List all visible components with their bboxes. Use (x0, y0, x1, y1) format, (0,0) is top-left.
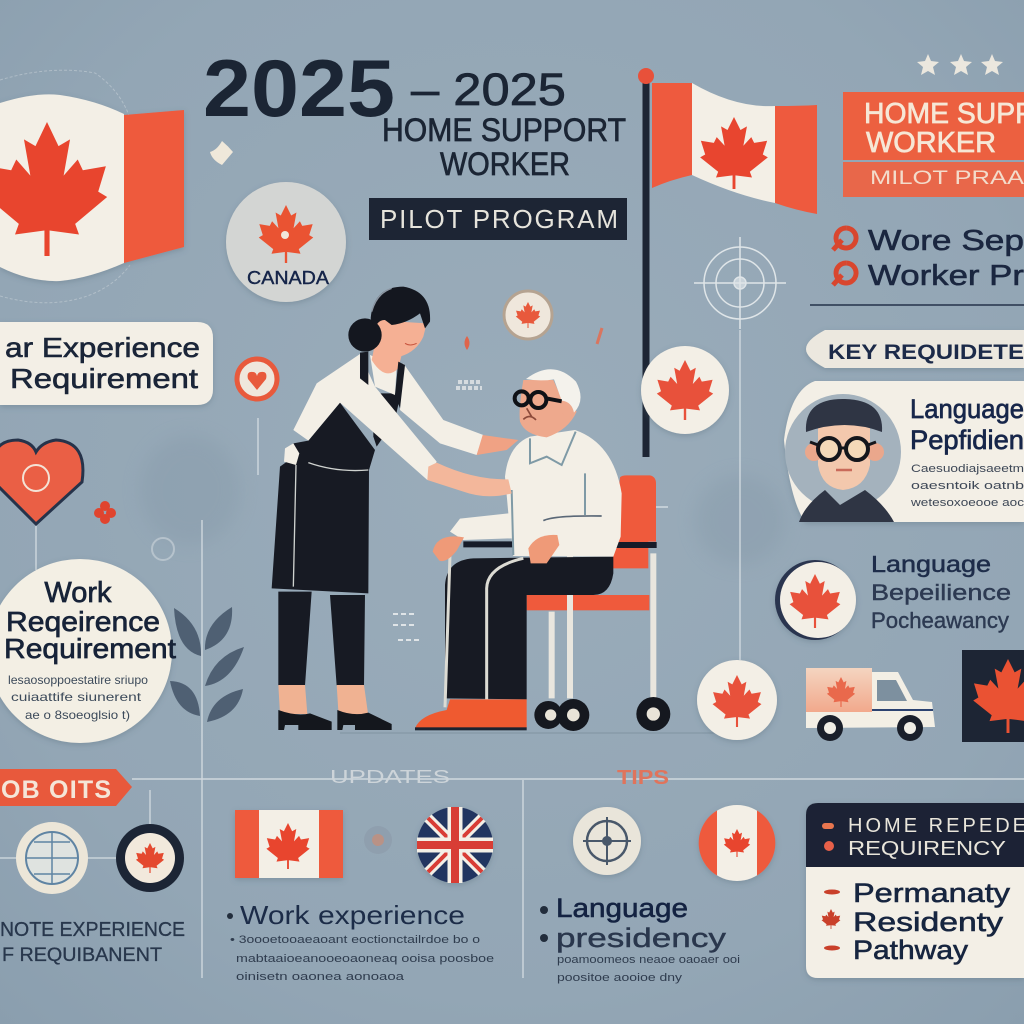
card header text: HOME REPEDE (848, 815, 1024, 837)
bullet text two: Worker Pr (868, 260, 1024, 292)
bullet text one: Wore Sep (868, 225, 1024, 257)
key requirements pill: KEY REQUIDETE (828, 341, 1024, 364)
card list: Residenty (853, 907, 1004, 937)
experience requirement pill (0, 322, 213, 405)
bullet icon one (833, 228, 856, 250)
decorative red marks (393, 328, 602, 640)
bottom left caption: NOTE EXPERIENCE (0, 919, 185, 941)
icon: ringed flower badge (116, 790, 184, 892)
column body line one: poamoomeos neaoe oaoaer ooi (557, 954, 740, 966)
updates label: UPDATES (330, 767, 450, 787)
language dependence text (871, 551, 1011, 633)
column heading: Work experience (240, 900, 465, 930)
card header text: REQUIRENCY (848, 838, 1006, 860)
circle body line one: lesaosoppoestatire sriupo (8, 673, 148, 687)
leaf circle lower (697, 660, 777, 740)
job tag (0, 769, 132, 806)
avatar (785, 394, 901, 522)
language column (540, 893, 740, 984)
circle body line two: cuiaattife siunerent (11, 690, 142, 704)
title: program name line one: HOME SUPPORT (382, 112, 626, 148)
language dependence text: Language (871, 551, 991, 577)
stars (917, 54, 1003, 75)
dark leaf block (962, 650, 1024, 742)
experience requirement pill: ar Experience (5, 332, 200, 363)
column heading line one: Language (556, 893, 688, 923)
flag with pole (638, 68, 817, 457)
canada circle flag (699, 805, 775, 881)
canadian flag bottom (235, 810, 343, 878)
card list: Permanaty (853, 878, 1011, 908)
work experience column (227, 900, 494, 983)
union jack circle (417, 807, 493, 883)
icon: small leaf badge (504, 291, 552, 339)
title: small year: – 2025 (411, 64, 566, 115)
column body line two: mabtaaioeanooeoaoneaq ooisa poosboe (236, 953, 494, 965)
title: program name line two: WORKER (440, 146, 570, 182)
card list: Pathway (853, 935, 969, 965)
language proficiency card (784, 381, 1024, 522)
column heading line two: presidency (556, 923, 727, 953)
column body line two: poositoe aooioe dny (557, 972, 683, 984)
work requirement circle (0, 559, 176, 743)
icon: faint ring (152, 538, 174, 560)
circle heading line three: Requirement (4, 633, 176, 664)
canadian flag left (0, 94, 184, 281)
title: large year: 2025 (203, 44, 395, 134)
icon: target (694, 237, 786, 329)
icon: red heart (0, 440, 83, 524)
icon: small red flower (94, 501, 116, 524)
circle body line three: ae o 8soeoglsio t) (25, 708, 130, 722)
column body line one: • 3oooetooaeaoant eoctionctailrdoe bo o (230, 934, 480, 946)
card list (853, 878, 1011, 965)
main illustration: caregiver and senior (272, 287, 670, 731)
card subheading: Pepfidien (910, 425, 1024, 455)
pilot program banner (369, 198, 627, 240)
senior man (415, 369, 622, 730)
bottom left caption (0, 919, 185, 966)
key requirements pill (806, 330, 1024, 368)
leaf circle upper (641, 346, 729, 434)
card body line three: wetesoxoeooe aoc (910, 497, 1024, 509)
card body line one: Caesuodiajsaeetm (911, 463, 1024, 475)
experience requirement pill: Requirement (10, 363, 198, 394)
job tag: OB OITS (1, 776, 111, 804)
canada badge (226, 182, 346, 302)
permanent residency card (806, 803, 1024, 978)
circle heading line one: Work (44, 577, 112, 609)
small flower icon (210, 141, 233, 165)
card list markers (822, 890, 840, 950)
red heading block (843, 92, 1024, 160)
language dependence text: Bepeilience (871, 580, 1011, 605)
wheelchair (463, 475, 670, 731)
canada badge: CANADA (247, 268, 329, 288)
circle heading line two: Reqeirence (6, 606, 160, 637)
language dependence text: Pocheawancy (871, 608, 1009, 633)
icon: small grey coin (364, 826, 392, 854)
caregiver woman (272, 287, 518, 730)
icon: heart badge (237, 359, 277, 399)
title (203, 44, 626, 182)
red heading block: WORKER (866, 127, 996, 159)
red subheading bar (843, 162, 1024, 197)
maple leaf badge right (775, 560, 856, 640)
bullet icon two (833, 263, 856, 285)
column body line three: oinisetn oaonea aonoaoa (236, 971, 405, 983)
bullet list right (833, 225, 1024, 292)
card body line two: oaesntoik oatnb (911, 480, 1024, 492)
icon: tips target (573, 807, 641, 875)
pilot program banner: PILOT PROGRAM (380, 204, 618, 234)
bottom left caption: F REQUIBANENT (2, 945, 162, 966)
tips label: TIPS (617, 767, 669, 789)
icon: delivery van (806, 668, 935, 741)
icon: globe badge (0, 822, 116, 894)
card header text (848, 815, 1024, 860)
decorative leaf sprig (170, 607, 244, 722)
red subheading bar: MILOT PRAA (870, 168, 1024, 189)
